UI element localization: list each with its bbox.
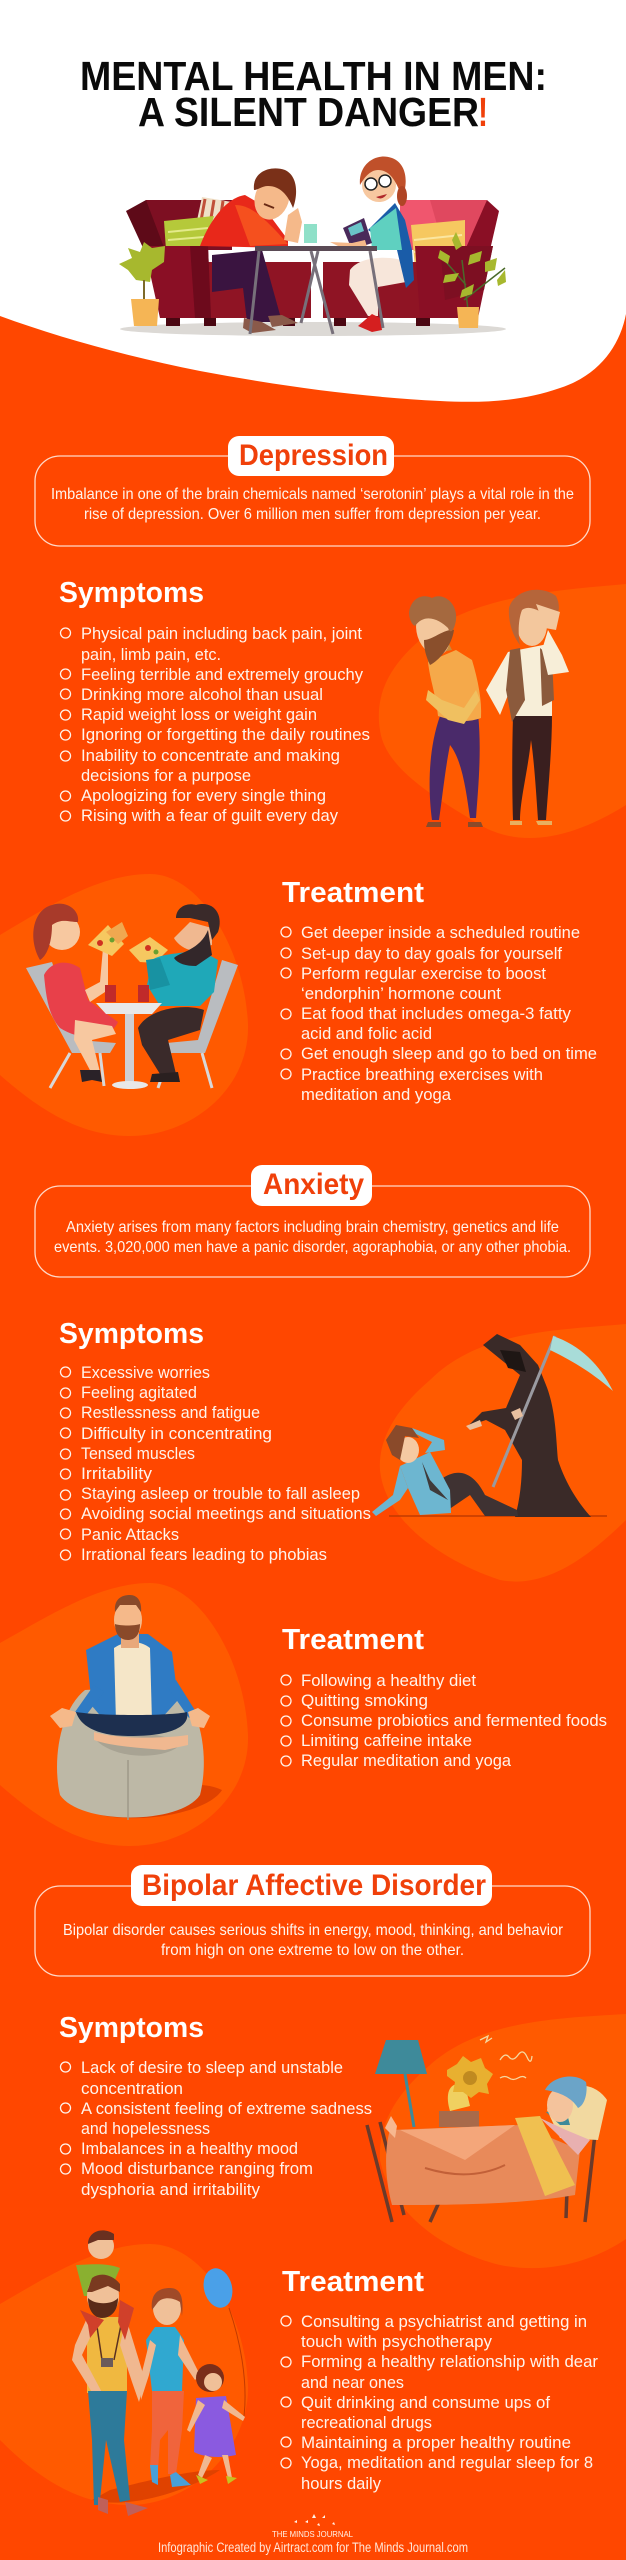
symptoms list: anxiety: Panic Attacks [81,1526,179,1544]
treatment list: depression: acid and folic acid [301,1025,432,1043]
symptoms list: anxiety: Tensed muscles [81,1445,195,1463]
title: ! [478,89,488,135]
illustration: couple eating pizza [26,904,238,1089]
treatment list: depression: Get deeper inside a scheduled routine [301,924,580,942]
symptoms list: depression: decisions for a purpose [81,767,251,785]
illustration: man meditating on beanbag [50,1595,222,1820]
panel: depression intro: Imbalance in one of the brain chemicals named ‘serotonin’ plays a vital role in the [51,486,574,503]
symptoms list: depression: Apologizing for every single thing [81,787,326,805]
symptoms list: anxiety: Restlessness and fatigue [81,1404,260,1422]
panel: anxiety intro: Anxiety arises from many factors including brain chemistry, genetics and life [66,1219,559,1236]
treatment list: bipolar: Maintaining a proper healthy routine [301,2434,571,2452]
treatment list: bipolar: touch with psychotherapy [301,2333,493,2351]
footer logo: the minds journal: THE MINDS JOURNAL [272,2529,353,2539]
treatment list: depression: Practice breathing exercises with [301,1066,543,1084]
symptoms list: depression: Rapid weight loss or weight gain [81,706,317,724]
illustration: grim reaper and falling man [372,1334,613,1517]
symptoms list: anxiety: Staying asleep or trouble to fall asleep [81,1485,360,1503]
blob behind couple [0,874,248,1136]
symptoms list: bipolar [60,2059,372,2199]
treatment list: anxiety: Consume probiotics and fermented foods [301,1712,607,1730]
man 1 [430,714,480,820]
blob behind family [0,2244,248,2505]
panel: anxiety intro: events. 3,020,000 men have a panic disorder, agoraphobia, or any other phobia. [54,1239,571,1256]
symptoms list: bipolar: Mood disturbance ranging from [81,2160,313,2178]
panel: depression intro: rise of depression. Over 6 million men suffer from depression per year. [84,506,541,523]
treatment heading: anxiety: Treatment [282,1624,424,1656]
treatment list: bipolar: Quit drinking and consume ups of [301,2394,550,2412]
symptoms list: depression: Feeling terrible and extremely grouchy [81,666,364,684]
symptoms list: bipolar: A consistent feeling of extreme sadness [81,2100,372,2118]
symptoms list: bipolar: concentration [81,2080,183,2098]
symptoms list: depression: Rising with a fear of guilt every day [81,807,339,825]
panel: depression intro [35,436,590,546]
symptoms list: bipolar: Lack of desire to sleep and unstable [81,2059,343,2077]
treatment list: depression: Set-up day to day goals for yourself [301,945,562,963]
illustration: man and therapist on sofas [119,157,506,336]
illustration: happy family walking [72,2230,245,2516]
symptoms list: anxiety: Difficulty in concentrating [81,1425,272,1443]
treatment list: anxiety: Regular meditation and yoga [301,1752,512,1770]
treatment heading: depression: Treatment [282,877,424,909]
symptoms list: anxiety: Irrational fears leading to phobias [81,1546,327,1564]
blob behind reaper [380,1324,626,1582]
blob behind sick men [379,584,626,838]
treatment list: bipolar: Consulting a psychiatrist and getting in [301,2313,587,2331]
treatment list: bipolar: Forming a healthy relationship with dear [301,2353,599,2371]
symptoms list: bipolar: and hopelessness [81,2120,210,2138]
left plant [119,242,165,282]
heading: bipolar affective disorder: Bipolar Affective Disorder [142,1869,486,1902]
heading: depression: Depression [239,439,388,472]
illustration: two men in pain [409,590,569,827]
treatment list: depression [281,924,597,1104]
symptoms heading: depression: Symptoms [59,577,204,609]
panel: bipolar intro: Bipolar disorder causes serious shifts in energy, mood, thinking, and behavior [63,1922,564,1939]
title: MENTAL HEALTH IN MEN: [80,53,547,99]
symptoms list: anxiety: Irritability [81,1465,153,1483]
treatment list: anxiety [281,1672,607,1770]
treatment list: anxiety: Following a healthy diet [301,1672,476,1690]
treatment list: bipolar: recreational drugs [301,2414,432,2432]
treatment list: depression: ‘endorphin’ hormone count [301,985,501,1003]
treatment list: depression: meditation and yoga [301,1086,452,1104]
title [80,53,547,135]
blob behind sick man in bed [380,2014,626,2268]
table [255,246,377,251]
symptoms list: depression: Ignoring or forgetting the daily routines [81,726,370,744]
symptoms heading: anxiety: Symptoms [59,1318,204,1350]
header white wave panel [0,0,626,402]
treatment list: bipolar: Yoga, meditation and regular sleep for 8 [301,2454,593,2472]
symptoms list: bipolar: Imbalances in a healthy mood [81,2140,298,2158]
symptoms list: anxiety: Feeling agitated [81,1384,197,1402]
treatment list: depression: Eat food that includes omega-3 fatty [301,1005,572,1023]
treatment list: bipolar [281,2313,599,2493]
treatment list: depression: Perform regular exercise to boost [301,965,546,983]
symptoms list: depression: Inability to concentrate and making [81,747,340,765]
treatment list: bipolar: and near ones [301,2374,404,2392]
man [212,250,282,322]
symptoms list: depression [60,625,370,825]
symptoms list: anxiety: Avoiding social meetings and situations [81,1505,371,1523]
illustration: sick man in bed with gramophone [367,2036,607,2222]
treatment list: anxiety: Limiting caffeine intake [301,1732,472,1750]
right plant [440,255,505,310]
footer logo: the minds journal [272,2514,353,2539]
man 2 [512,714,552,820]
symptoms list: bipolar: dysphoria and irritability [81,2181,261,2199]
symptoms list: depression: pain, limb pain, etc. [81,646,221,664]
footer credit: Infographic Created by Airtract.com for The Minds Journal.com [158,2540,468,2555]
panel: bipolar intro: from high on one extreme to low on the other. [161,1942,464,1959]
treatment heading: bipolar: Treatment [282,2266,424,2298]
title: A SILENT DANGER [138,89,479,135]
symptoms list: depression: Drinking more alcohol than usual [81,686,323,704]
panel: bipolar intro [35,1865,590,1976]
heading: anxiety: Anxiety [263,1168,364,1201]
symptoms list: depression: Physical pain including back pain, joint [81,625,362,643]
woman [349,258,408,316]
treatment list: depression: Get enough sleep and go to bed on time [301,1045,597,1063]
treatment list: anxiety: Quitting smoking [301,1692,428,1710]
symptoms list: anxiety [60,1364,371,1564]
panel: anxiety intro [35,1165,590,1277]
blob behind meditating man [0,1583,248,1846]
treatment list: bipolar: hours daily [301,2475,382,2493]
symptoms list: anxiety: Excessive worries [81,1364,210,1382]
symptoms heading: bipolar: Symptoms [59,2012,204,2044]
